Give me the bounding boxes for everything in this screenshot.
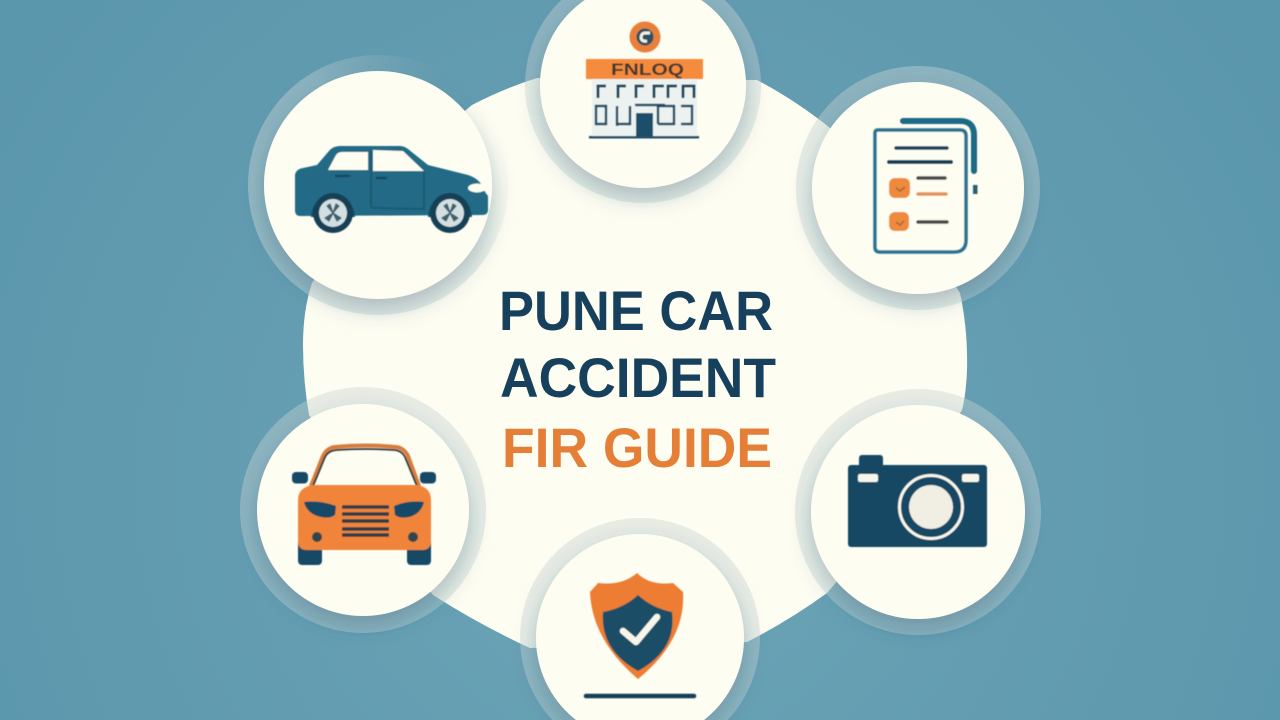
title xyxy=(499,279,776,479)
icon: police station building xyxy=(586,22,703,138)
icon: orange car front view xyxy=(292,446,436,565)
node: police station xyxy=(525,0,761,203)
icon: checklist document xyxy=(875,121,978,252)
title: PUNE CAR xyxy=(499,279,773,342)
title: ACCIDENT xyxy=(500,346,776,409)
node: side view car xyxy=(248,55,508,315)
icon: camera xyxy=(848,455,987,547)
node: shield xyxy=(520,518,760,720)
node: camera xyxy=(795,389,1041,635)
node: orange car front xyxy=(240,387,486,633)
icon: shield with check xyxy=(586,573,694,696)
central cream panel xyxy=(303,78,967,648)
node: documents xyxy=(796,66,1040,310)
icon: police station building: FNLOQ xyxy=(611,60,684,79)
icon: side view car xyxy=(295,146,488,233)
title: FIR GUIDE xyxy=(502,416,772,479)
